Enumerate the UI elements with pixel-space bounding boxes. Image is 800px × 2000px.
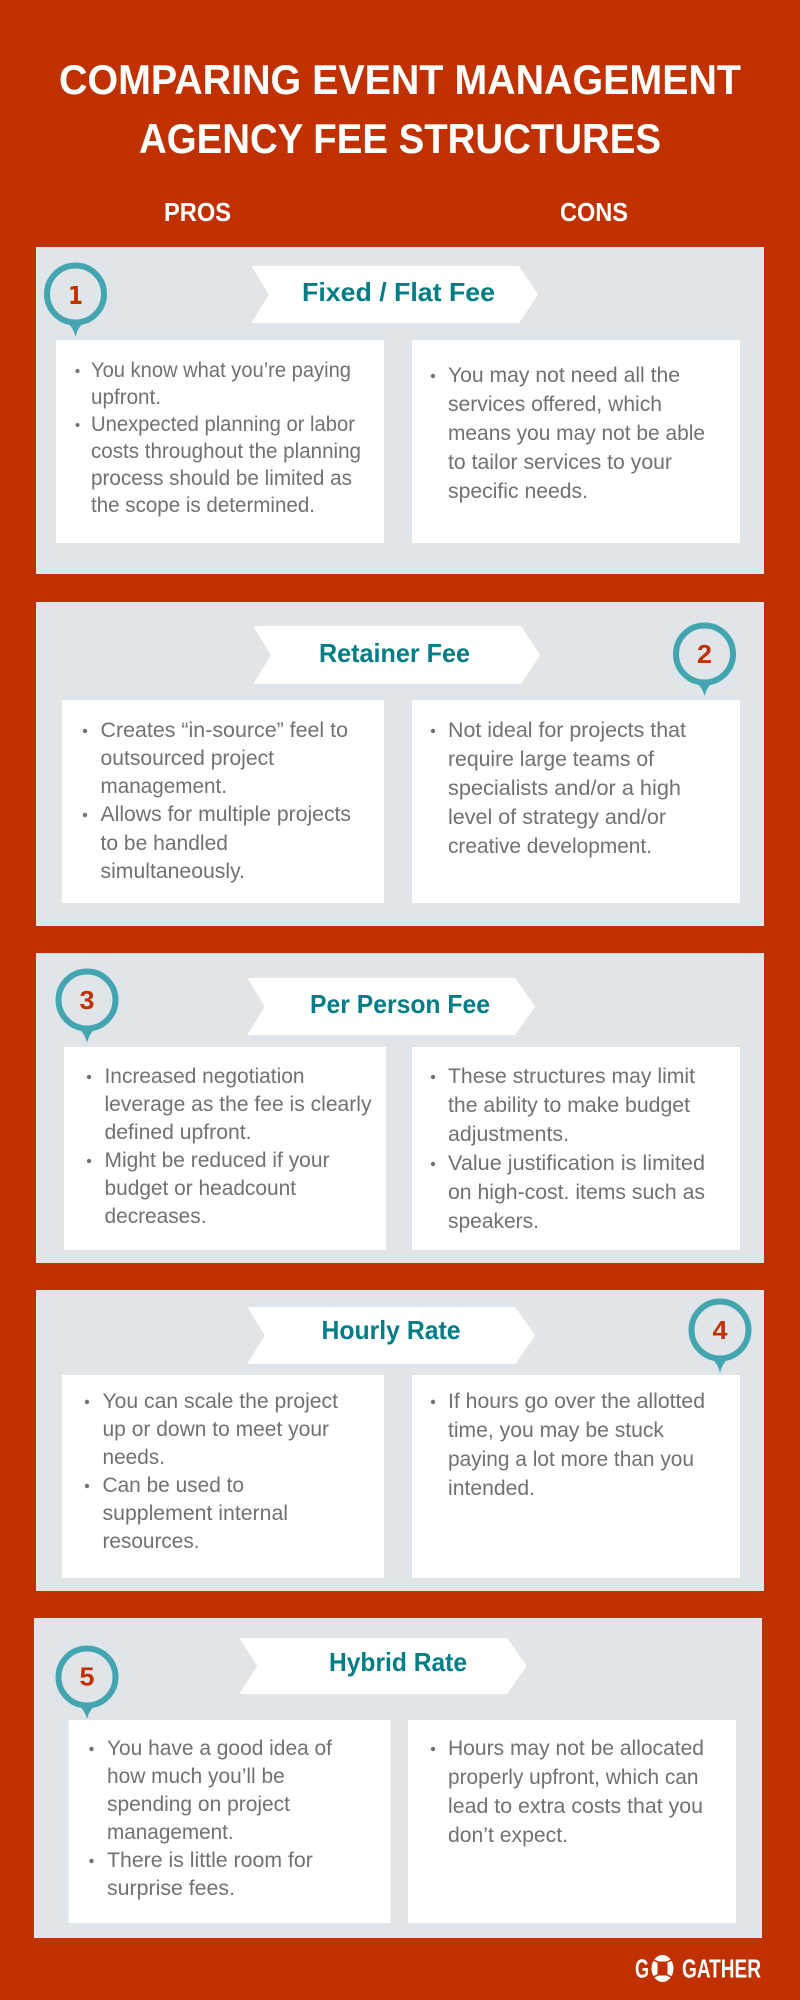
marker 3 (58, 972, 116, 1043)
title: AGENCY FEE STRUCTURES (139, 115, 661, 162)
pros text 1: costs throughout the planning (91, 440, 361, 463)
pros text 3: Increased negotiation (104, 1065, 304, 1088)
pros text 4: resources. (102, 1530, 200, 1553)
marker 5 (58, 1648, 116, 1719)
pros text 3: budget or headcount (104, 1177, 296, 1200)
pros text 3: decreases. (104, 1205, 206, 1228)
marker 5: 5 (80, 1662, 94, 1692)
ribbon: retainer fee: Retainer Fee (319, 638, 470, 668)
cons text 4 (431, 1390, 705, 1500)
cons text 5: Hours may not be allocated (448, 1737, 704, 1760)
cons text 3: adjustments. (448, 1123, 569, 1146)
cons text 4: If hours go over the allotted (448, 1390, 705, 1413)
cons text 1: means you may not be able (448, 422, 705, 445)
cons box 4 (412, 1375, 740, 1578)
pros text 4: up or down to meet your (102, 1418, 329, 1441)
column heading: cons: CONS (560, 197, 628, 227)
pros text 1: the scope is determined. (91, 494, 315, 517)
pros text 4: supplement internal (102, 1502, 288, 1525)
ribbon: retainer fee (255, 627, 539, 683)
cons text 1: specific needs. (448, 480, 588, 503)
cons box 3 (412, 1047, 740, 1250)
pros box 1 (56, 340, 384, 543)
cons text 3: on high-cost. items such as (448, 1181, 705, 1204)
pros text 5 (89, 1737, 332, 1900)
cons text 1: to tailor services to your (448, 451, 672, 474)
cons text 2: specialists and/or a high (448, 777, 681, 800)
marker 4: 4 (712, 1315, 728, 1345)
cons text 4: paying a lot more than you (448, 1448, 694, 1471)
marker 1: 1 (68, 281, 83, 310)
panel: fixed / flat fee (36, 247, 764, 574)
cons text 1: You may not need all the (448, 364, 680, 387)
cons text 1: services offered, which (448, 393, 662, 416)
pros text 2 (83, 719, 351, 883)
pros text 2: simultaneously. (100, 860, 245, 883)
panel: retainer fee (36, 602, 764, 926)
pros text 5: You have a good idea of (107, 1737, 332, 1760)
pros text 5: surprise fees. (107, 1877, 235, 1900)
cons text 3 (431, 1065, 705, 1233)
logo: GoGather (635, 1954, 761, 1984)
pros box 3 (64, 1047, 386, 1250)
ribbon: per person fee: Per Person Fee (310, 989, 490, 1019)
pros text 1: You know what you’re paying (91, 359, 351, 382)
cons text 3: the ability to make budget (448, 1094, 690, 1117)
pros text 2: Creates “in-source” feel to (100, 719, 348, 742)
icon: logo mark (651, 1955, 674, 1982)
pros text 4: You can scale the project (102, 1390, 338, 1413)
pros text 1: Unexpected planning or labor (91, 413, 355, 436)
cons box 2 (412, 700, 740, 903)
marker 2 (676, 626, 733, 696)
ribbon: per person fee (249, 979, 534, 1034)
cons text 4: intended. (448, 1477, 535, 1500)
panel: per person fee (36, 953, 764, 1263)
ribbon: fixed / flat fee: Fixed / Flat Fee (302, 277, 495, 307)
cons text 3: These structures may limit (448, 1065, 695, 1088)
cons text 5 (431, 1737, 704, 1847)
pros text 2: to be handled (100, 832, 228, 855)
marker 1 (47, 266, 104, 337)
pros text 4: needs. (102, 1446, 165, 1469)
ribbon: fixed / flat fee (253, 267, 537, 322)
pros text 3: Might be reduced if your (104, 1149, 330, 1172)
pros text 1: process should be limited as (91, 467, 352, 490)
cons text 2: Not ideal for projects that (448, 719, 686, 742)
cons box 1 (412, 340, 740, 543)
pros text 2: management. (100, 775, 227, 798)
ribbon: hybrid rate: Hybrid Rate (329, 1647, 467, 1677)
pros text 4: Can be used to (102, 1474, 244, 1497)
pros text 4 (85, 1390, 338, 1553)
ribbon: hourly rate (249, 1308, 534, 1363)
pros text 1 (76, 359, 361, 517)
pros text 2: outsourced project (100, 747, 274, 770)
cons text 2 (431, 719, 686, 858)
cons text 1 (431, 364, 705, 503)
pros box 5 (68, 1720, 390, 1923)
pros text 5: management. (107, 1821, 234, 1844)
title: COMPARING EVENT MANAGEMENT (59, 56, 741, 103)
title (59, 56, 741, 162)
cons text 2: require large teams of (448, 748, 654, 771)
pros text 2: Allows for multiple projects (100, 803, 351, 826)
pros text 5: how much you’ll be (107, 1765, 285, 1788)
cons box 5 (408, 1720, 736, 1923)
ribbon: hourly rate: Hourly Rate (322, 1315, 460, 1345)
cons text 5: don’t expect. (448, 1824, 568, 1847)
marker 3: 3 (80, 985, 94, 1015)
panel: hybrid rate (34, 1618, 762, 1938)
pros text 3: defined upfront. (104, 1121, 252, 1144)
ribbon: hybrid rate (241, 1639, 526, 1693)
marker 2: 2 (697, 639, 712, 669)
cons text 2: level of strategy and/or (448, 806, 666, 829)
cons text 5: lead to extra costs that you (448, 1795, 703, 1818)
marker 4 (692, 1302, 748, 1373)
pros box 4 (62, 1375, 384, 1578)
cons text 3: Value justification is limited (448, 1152, 705, 1175)
cons text 2: creative development. (448, 835, 652, 858)
column heading: pros: PROS (164, 197, 231, 227)
pros box 2 (62, 700, 384, 903)
pros text 5: spending on project (107, 1793, 290, 1816)
cons text 5: properly upfront, which can (448, 1766, 698, 1789)
pros text 3: leverage as the fee is clearly (104, 1093, 372, 1116)
panel: hourly rate (36, 1290, 764, 1591)
cons text 4: time, you may be stuck (448, 1419, 665, 1442)
pros text 5: There is little room for (107, 1849, 313, 1872)
pros text 3 (87, 1065, 372, 1228)
logo: GoGather: G (635, 1954, 649, 1984)
logo: GoGather: GATHER (682, 1954, 761, 1984)
cons text 3: speakers. (448, 1210, 539, 1233)
pros text 1: upfront. (91, 386, 161, 409)
